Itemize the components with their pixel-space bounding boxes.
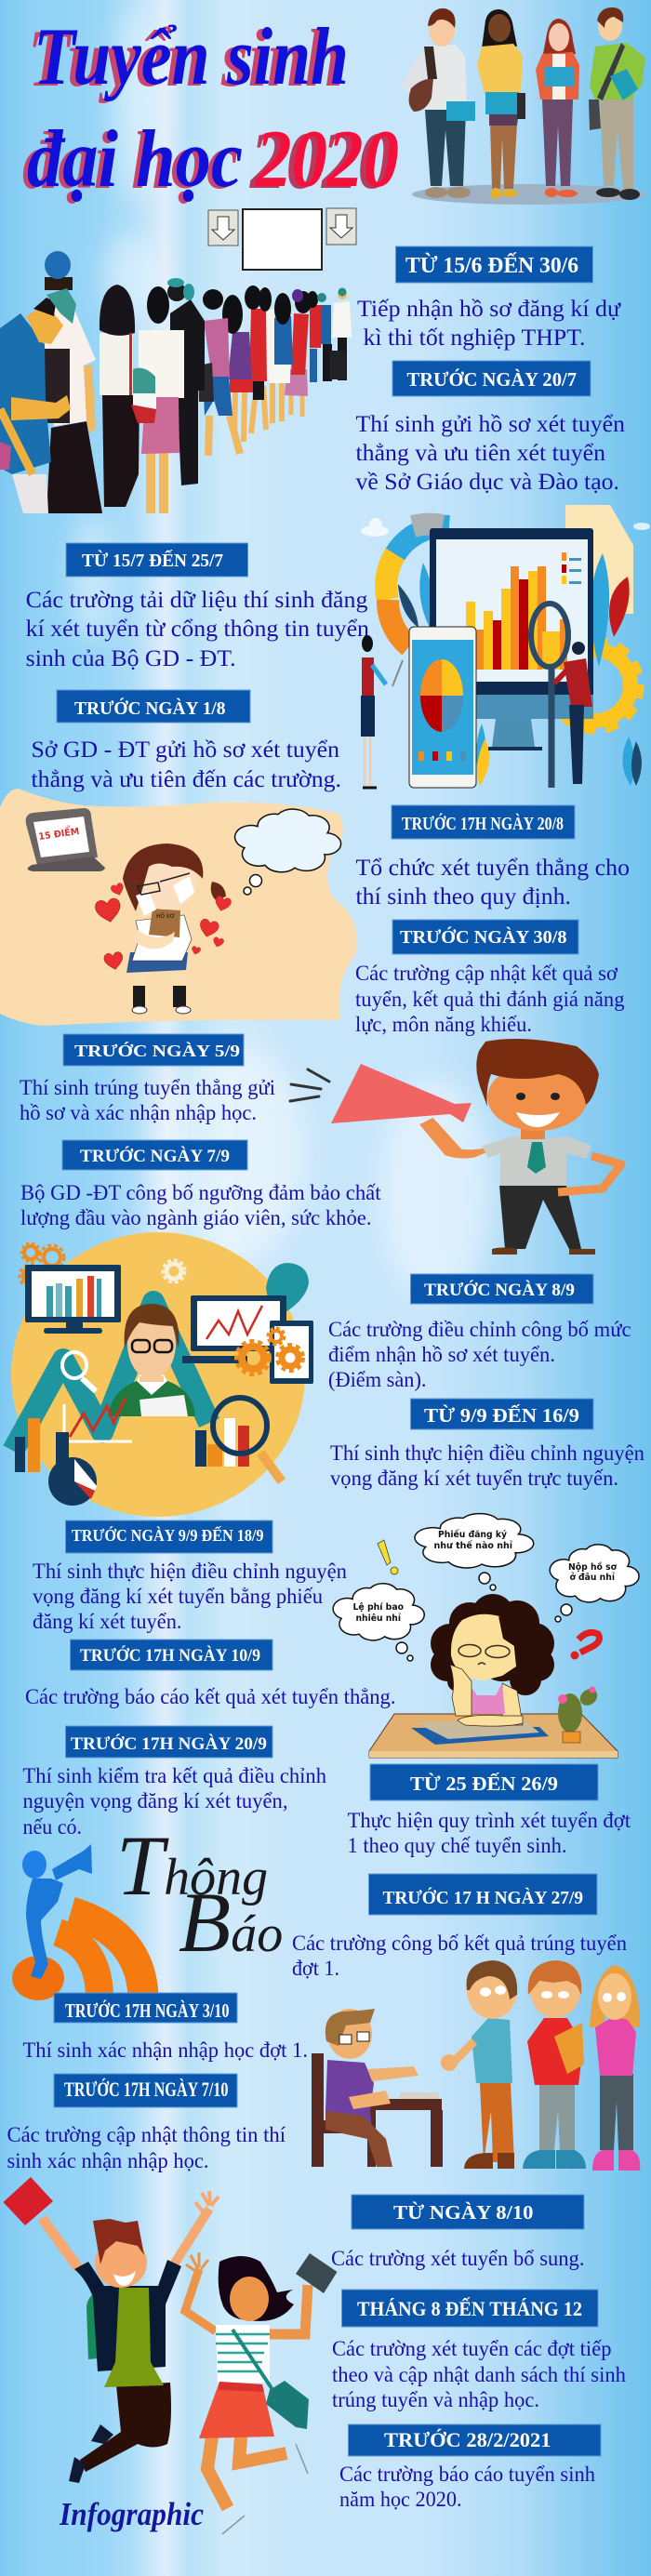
arm bbox=[450, 1665, 472, 1716]
text block: quy trình xét tuyển: 1 theo quy chế tuyển sinh. bbox=[348, 1834, 567, 1857]
text block: kiểm tra kết quả: Thí sinh kiểm tra kết quả điều chỉnh bbox=[22, 1764, 326, 1787]
text block: báo cáo tuyển sinh bbox=[339, 2463, 595, 2511]
badge: TRƯỚC 17H NGÀY 20/9 bbox=[65, 1726, 272, 1758]
illustration: blue figure with megaphone and orange signal bbox=[12, 1844, 143, 2000]
text block: báo cáo tuyển sinh: Các trường báo cáo tuyển sinh bbox=[339, 2463, 595, 2486]
badge: TRƯỚC NGÀY 1/8: TRƯỚC NGÀY 1/8 bbox=[74, 697, 225, 719]
text block: kiểm tra kết quả: nếu có. bbox=[22, 1815, 82, 1839]
small clouds bbox=[361, 518, 650, 537]
badge: TRƯỚC 17 H NGÀY 27/9 bbox=[368, 1874, 597, 1915]
badge: TRƯỚC NGÀY 20/7: TRƯỚC NGÀY 20/7 bbox=[407, 368, 577, 391]
badge: TỪ 15/6 ĐẾN 30/6 bbox=[396, 246, 593, 283]
thought bubble bbox=[235, 809, 341, 895]
illustration: data charts with monitor and tablet bbox=[361, 505, 650, 788]
person in pink skirt with white blouse bbox=[139, 286, 184, 513]
right monitor with zigzag bbox=[182, 1295, 286, 1363]
text block: quy trình xét tuyển bbox=[348, 1809, 631, 1857]
monitor bbox=[430, 528, 593, 750]
title: Tuyển sinh bbox=[33, 12, 349, 102]
text block: xét tuyển thẳng bbox=[355, 856, 630, 910]
text block: Sở GD gửi hồ sơ: Sở GD - ĐT gửi hồ sơ xét tuyển bbox=[32, 737, 340, 763]
badge: TỪ 25 ĐẾN 26/9: TỪ 25 ĐẾN 26/9 bbox=[410, 1773, 558, 1795]
text block: điều chỉnh trực tuyến: Thí sinh thực hiện điều chỉnh nguyện bbox=[330, 1441, 644, 1465]
badge: TRƯỚC NGÀY 30/8 bbox=[392, 920, 578, 954]
text block: nhận hồ sơ: Tiếp nhận hồ sơ đăng kí dự bbox=[357, 297, 621, 322]
left arm bbox=[423, 1121, 485, 1156]
man in red sweater bbox=[554, 642, 592, 784]
badge: TRƯỚC NGÀY 8/9 bbox=[411, 1274, 593, 1304]
text block: xác nhận nhập học: Thí sinh xác nhận nhập học đợt 1. bbox=[22, 2038, 308, 2062]
badge: TRƯỚC 17 H NGÀY 27/9: TRƯỚC 17 H NGÀY 27/9 bbox=[383, 1886, 583, 1908]
sound lines bbox=[290, 1069, 329, 1101]
icon: cactus bbox=[558, 1685, 601, 1743]
illustration: man with megaphone bbox=[290, 1039, 621, 1255]
illustration: thinking girl at desk bbox=[333, 1514, 639, 1758]
small bars bbox=[15, 1418, 249, 1472]
text block: kiểm tra kết quả: nguyện vọng đăng kí xét tuyển, bbox=[22, 1789, 288, 1812]
text block: trúng tuyển thẳng bbox=[20, 1076, 275, 1124]
text block: công bố trúng tuyển: đợt 1. bbox=[292, 1957, 339, 1980]
text block: tải dữ liệu: Các trường tải dữ liệu thí sinh đăng bbox=[26, 588, 368, 613]
magnifier white bbox=[62, 1352, 96, 1391]
badge: TRƯỚC 17H NGÀY 3/10 bbox=[54, 1993, 237, 2023]
background light glows bbox=[71, 0, 493, 1302]
arrow button right bbox=[326, 208, 356, 245]
badge: TỪ NGÀY 8/10 bbox=[352, 2195, 584, 2229]
thought bubble: lệ phí: nhiêu nhỉ bbox=[355, 1613, 401, 1624]
man in teal shirt bbox=[441, 1960, 517, 2169]
text block: điều chỉnh bằng phiếu: đăng kí xét tuyển. bbox=[33, 1610, 182, 1633]
text block: xét tuyển các đợt tiếp theo: trúng tuyển và nhập học. bbox=[332, 2388, 539, 2411]
badge: TRƯỚC 17H NGÀY 3/10: TRƯỚC 17H NGÀY 3/10 bbox=[65, 1999, 229, 2022]
document behind monitor bbox=[565, 505, 633, 614]
title bbox=[22, 12, 399, 206]
text block: gửi hồ sơ xét tuyển thẳng: thẳng và ưu tiên xét tuyển bbox=[355, 441, 606, 466]
badge: TRƯỚC NGÀY 30/8: TRƯỚC NGÀY 30/8 bbox=[400, 925, 567, 948]
lower line chart bbox=[64, 1398, 132, 1441]
badge: TRƯỚC 28/2/2021: TRƯỚC 28/2/2021 bbox=[384, 2428, 551, 2451]
text block: xét tuyển các đợt tiếp theo: Các trường xét tuyển các đợt tiếp bbox=[332, 2337, 612, 2360]
text block: cập nhật thông tin: sinh xác nhận nhập học. bbox=[7, 2149, 208, 2172]
hearts bbox=[94, 883, 232, 971]
person in black trousers with long hair bbox=[100, 285, 156, 507]
text block: xét tuyển thẳng: Tổ chức xét tuyển thẳng cho bbox=[355, 856, 630, 881]
student 4 bbox=[589, 7, 645, 200]
shoulder and dress bbox=[502, 1683, 523, 1725]
leaves bbox=[398, 553, 642, 786]
illustration: analyst in yellow circle bbox=[11, 1232, 313, 1517]
analyst bbox=[108, 1304, 195, 1416]
thought bubble: nộp hồ sơ: ở đâu nhỉ bbox=[569, 1572, 615, 1583]
teal mountains bbox=[13, 1302, 209, 1451]
arrow button left bbox=[208, 210, 238, 246]
badge: TỪ 15/7 ĐẾN 25/7: TỪ 15/7 ĐẾN 25/7 bbox=[82, 549, 223, 571]
badge: TRƯỚC NGÀY 1/8 bbox=[57, 690, 250, 723]
text block: điểm sàn bbox=[328, 1318, 631, 1391]
text block: gửi hồ sơ xét tuyển thẳng: về Sở Giáo dục và Đào tạo. bbox=[355, 470, 619, 495]
title: đại học bbox=[27, 114, 243, 205]
text block: ngưỡng đảm bảo chất lượng: Bộ GD -ĐT công bố ngưỡng đảm bảo chất bbox=[20, 1181, 381, 1204]
text block: quy trình xét tuyển: Thực hiện quy trình xét tuyển đợt bbox=[348, 1809, 631, 1832]
badge: TỪ 9/9 ĐẾN 16/9: TỪ 9/9 ĐẾN 16/9 bbox=[424, 1404, 579, 1427]
pie chart bbox=[48, 1457, 97, 1506]
teal blob bbox=[266, 1263, 309, 1316]
text block: nhận hồ sơ bbox=[357, 297, 621, 351]
text block: công bố trúng tuyển: Các trường công bố kết quả trúng tuyển bbox=[292, 1932, 627, 1955]
badge: TỪ 15/7 ĐẾN 25/7 bbox=[66, 543, 247, 577]
text block: kiểm tra kết quả bbox=[22, 1764, 326, 1839]
badge: TỪ 15/6 ĐẾN 30/6: TỪ 15/6 ĐẾN 30/6 bbox=[405, 253, 578, 278]
badge: TRƯỚC NGÀY 5/9: TRƯỚC NGÀY 5/9 bbox=[74, 1041, 240, 1060]
title: 2020 bbox=[254, 114, 399, 205]
badge: TỪ 9/9 ĐẾN 16/9 bbox=[411, 1399, 593, 1429]
left monitor with bars bbox=[25, 1265, 121, 1334]
text block: tải dữ liệu: sinh của Bộ GD - ĐT. bbox=[26, 646, 236, 671]
megaphone bbox=[331, 1064, 472, 1123]
boy bbox=[4, 2177, 219, 2483]
thought bubble: nộp hồ sơ bbox=[550, 1545, 639, 1622]
laptop: 15 ĐIỂM bbox=[37, 823, 80, 843]
badge: THÁNG 8 ĐẾN THÁNG 12: THÁNG 8 ĐẾN THÁNG 12 bbox=[357, 2297, 582, 2320]
shirt bbox=[482, 1136, 591, 1186]
magnifier bbox=[531, 604, 568, 788]
badge: TRƯỚC 17H NGÀY 20/8: TRƯỚC 17H NGÀY 20/8 bbox=[402, 812, 564, 834]
title: Tuyển sinh bbox=[28, 14, 343, 104]
boy in red shirt bbox=[523, 1960, 586, 2169]
badge: TRƯỚC NGÀY 7/9: TRƯỚC NGÀY 7/9 bbox=[80, 1146, 230, 1166]
curly hair bbox=[431, 1594, 554, 1695]
woman with laptop bbox=[361, 635, 403, 788]
mid people bbox=[167, 278, 274, 485]
text block: điều chỉnh trực tuyến: vọng đăng kí xét tuyển trực tuyến. bbox=[330, 1467, 618, 1490]
badge: TRƯỚC 28/2/2021 bbox=[348, 2424, 601, 2456]
text block: báo cáo tuyển sinh: năm học 2020. bbox=[339, 2488, 461, 2511]
tablet bbox=[270, 1321, 313, 1384]
text block: báo cáo xét tuyển thẳng: Các trường báo cáo kết quả xét tuyển thẳng. bbox=[25, 1685, 396, 1708]
student 2 bbox=[477, 9, 525, 199]
navy magnifier bbox=[213, 1398, 282, 1481]
text block: điểm sàn: điểm nhận hồ sơ xét tuyển. bbox=[328, 1343, 555, 1366]
badge: TRƯỚC 17H NGÀY 20/9: TRƯỚC 17H NGÀY 20/9 bbox=[71, 1733, 267, 1754]
badge: TỪ NGÀY 8/10: TỪ NGÀY 8/10 bbox=[393, 2201, 534, 2224]
text block: điều chỉnh trực tuyến bbox=[330, 1441, 644, 1490]
badge: TRƯỚC 17H NGÀY 7/10 bbox=[54, 2074, 237, 2107]
thought bubble: phiếu đăng ký: Phiếu đăng ký bbox=[438, 1528, 507, 1540]
sand panel bbox=[0, 789, 357, 1026]
text block: Sở GD gửi hồ sơ: thẳng và ưu tiên đến các trường. bbox=[32, 767, 341, 792]
script text: Thông Báo: Thông bbox=[116, 1818, 268, 1913]
seated man at desk bbox=[312, 2009, 443, 2167]
blue figure bbox=[22, 1844, 92, 1979]
badge: TỪ 25 ĐẾN 26/9 bbox=[370, 1764, 598, 1800]
gear bbox=[551, 641, 640, 730]
bar chart on monitor bbox=[466, 552, 581, 670]
girl bbox=[431, 1594, 554, 1726]
label: Infographic: Infographic bbox=[59, 2496, 204, 2532]
text block: trúng tuyển thẳng: hồ sơ và xác nhận nhập học. bbox=[20, 1101, 257, 1124]
text block: ngưỡng đảm bảo chất lượng: lượng đầu vào ngành giáo viên, sức khỏe. bbox=[20, 1206, 372, 1229]
text block: xét tuyển thẳng: thí sinh theo quy định. bbox=[355, 884, 571, 910]
text block: công bố trúng tuyển bbox=[292, 1932, 627, 1980]
badge: TRƯỚC 17H NGÀY 10/9 bbox=[71, 1640, 272, 1670]
trousers bbox=[492, 1186, 595, 1255]
badge: TRƯỚC NGÀY 8/9: TRƯỚC NGÀY 8/9 bbox=[424, 1280, 575, 1300]
text block: cập nhật kết quả sơ tuyển: lực, môn năng khiếu. bbox=[355, 1013, 532, 1036]
text block: gửi hồ sơ xét tuyển thẳng bbox=[355, 412, 626, 495]
illustration: jumping students bbox=[4, 2177, 337, 2534]
icon: exclamation mark bbox=[378, 1540, 398, 1574]
badge: TRƯỚC NGÀY 7/9 bbox=[62, 1140, 247, 1170]
head bbox=[476, 1039, 599, 1139]
script text: Thông Báo bbox=[116, 1818, 283, 1970]
badge: THÁNG 8 ĐẾN THÁNG 12 bbox=[342, 2290, 598, 2327]
thought bubble: phiếu đăng ký bbox=[415, 1514, 534, 1590]
title: 2020 bbox=[248, 116, 393, 206]
thought bubble: nộp hồ sơ: Nộp hồ sơ bbox=[568, 1560, 618, 1573]
gears bbox=[20, 1243, 185, 1287]
badge: TRƯỚC NGÀY 9/9 ĐẾN 18/9: TRƯỚC NGÀY 9/9 ĐẾN 18/9 bbox=[72, 1525, 264, 1545]
motion lines bbox=[222, 2444, 308, 2534]
text block: trúng tuyển thẳng: Thí sinh trúng tuyển thẳng gửi bbox=[20, 1076, 275, 1099]
girl bbox=[123, 843, 226, 1014]
text block: xét tuyển các đợt tiếp theo bbox=[332, 2337, 626, 2411]
text block: cập nhật kết quả sơ tuyển: Các trường cập nhật kết quả sơ bbox=[355, 962, 618, 985]
orange base bbox=[12, 1956, 64, 2000]
text block: Sở GD gửi hồ sơ bbox=[32, 737, 341, 792]
text block: cập nhật kết quả sơ tuyển: tuyển, kết quả thi đánh giá năng bbox=[355, 988, 625, 1011]
text block: gửi hồ sơ xét tuyển thẳng: Thí sinh gửi hồ sơ xét tuyển bbox=[355, 412, 626, 437]
text block: xét tuyển các đợt tiếp theo: theo và cập nhật danh sách thí sinh bbox=[332, 2363, 626, 2386]
far people at end of queue bbox=[269, 288, 352, 423]
girl: HỒ SƠ bbox=[156, 913, 176, 920]
text block: cập nhật thông tin bbox=[7, 2123, 286, 2172]
student 1 bbox=[402, 8, 475, 198]
orange gears bbox=[236, 1328, 303, 1374]
text block: điểm sàn: Các trường điều chỉnh công bố mức bbox=[328, 1318, 631, 1341]
orange signal arcs bbox=[58, 1912, 143, 1995]
text block: ngưỡng đảm bảo chất lượng bbox=[20, 1181, 381, 1229]
badge: TRƯỚC 17H NGÀY 20/8 bbox=[392, 805, 575, 839]
text block: điểm sàn: (Điểm sàn). bbox=[328, 1368, 426, 1391]
text block: tải dữ liệu: kí xét tuyển từ cổng thông tin tuyển bbox=[26, 617, 370, 642]
text block: điều chỉnh bằng phiếu: Thí sinh thực hiện điều chỉnh nguyện bbox=[33, 1560, 347, 1583]
front man in blue shirt bbox=[0, 288, 76, 513]
illustration: happy girl on sand panel bbox=[0, 789, 357, 1026]
tablet with pie chart bbox=[409, 627, 476, 788]
text block: nhận hồ sơ: kì thi tốt nghiệp THPT. bbox=[363, 325, 586, 351]
right arm bbox=[558, 1156, 621, 1192]
badge: TRƯỚC NGÀY 20/7 bbox=[392, 361, 591, 396]
text block: tải dữ liệu bbox=[26, 588, 370, 671]
script text: Thông Báo: Báo bbox=[179, 1875, 283, 1970]
yellow circle bbox=[11, 1232, 305, 1517]
illustration: four students bbox=[402, 7, 646, 205]
student 3 bbox=[536, 19, 579, 197]
text block: cập nhật thông tin: Các trường cập nhật thông tin thí bbox=[7, 2123, 286, 2146]
title: đại học bbox=[22, 116, 238, 206]
donut chart bbox=[386, 524, 449, 646]
thought bubble: lệ phí bbox=[333, 1584, 424, 1661]
woman in pink jacket bbox=[590, 1965, 640, 2171]
person in white shirt with blue cap bbox=[40, 251, 102, 513]
badge: TRƯỚC 17H NGÀY 10/9: TRƯỚC 17H NGÀY 10/9 bbox=[80, 1645, 260, 1666]
badge: TRƯỚC NGÀY 5/9 bbox=[63, 1034, 244, 1066]
icon: question mark bbox=[571, 1632, 599, 1659]
thought bubble: phiếu đăng ký: như thế nào nhỉ bbox=[433, 1539, 512, 1551]
tie bbox=[527, 1142, 546, 1174]
girl bbox=[185, 2252, 337, 2508]
laptop bbox=[26, 808, 105, 871]
text block: điều chỉnh bằng phiếu: vọng đăng kí xét tuyển bằng phiếu bbox=[33, 1585, 323, 1608]
text block: cập nhật kết quả sơ tuyển bbox=[355, 962, 625, 1036]
thought bubble: lệ phí: Lệ phí bao bbox=[353, 1601, 404, 1613]
desk bbox=[369, 1714, 618, 1758]
illustration: four cartoon students and staff bbox=[312, 1960, 640, 2171]
badge: TRƯỚC 17H NGÀY 7/10: TRƯỚC 17H NGÀY 7/10 bbox=[64, 2078, 229, 2101]
text block: xét tuyển bổ sung: Các trường xét tuyển bổ sung. bbox=[331, 2247, 584, 2270]
face bbox=[451, 1614, 516, 1680]
badge: TRƯỚC NGÀY 9/9 ĐẾN 18/9 bbox=[65, 1520, 272, 1553]
icon: blank sign with arrows bbox=[208, 208, 356, 270]
text block: điều chỉnh bằng phiếu bbox=[33, 1560, 347, 1633]
illustration: queue of people bbox=[0, 251, 352, 513]
